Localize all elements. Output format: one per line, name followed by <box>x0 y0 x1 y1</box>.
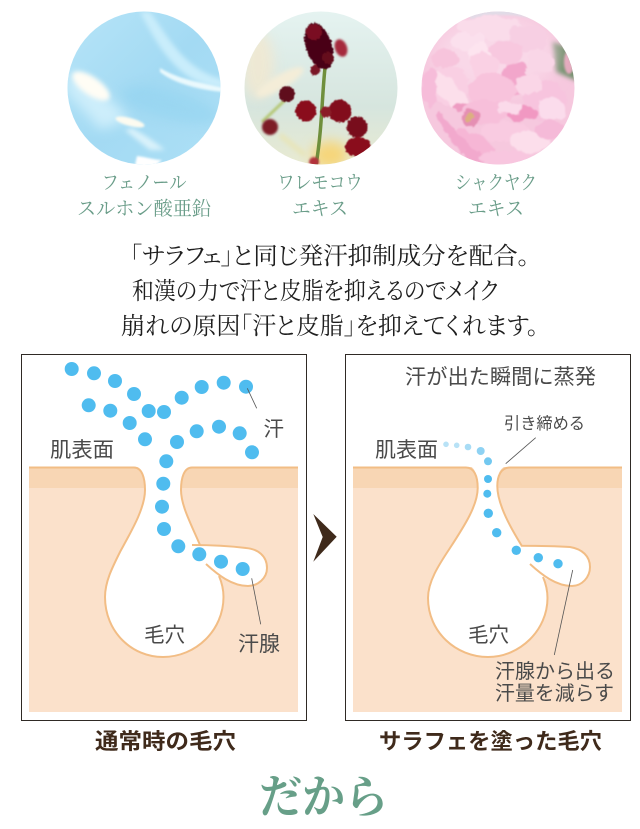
ingredient label: peony extract <box>455 173 537 220</box>
ingredient label: peony extract: シャクヤク <box>455 173 537 194</box>
label: skin surface: 肌表面 <box>375 439 438 462</box>
ingredient label: peony extract: エキス <box>468 199 524 220</box>
photo: burnet flower <box>244 12 398 164</box>
ingredient label: phenol sulfonic acid zinc: スルホン酸亜鉛 <box>77 198 211 220</box>
ingredient label: burnet extract <box>278 173 362 220</box>
photo: pink peony <box>422 12 574 164</box>
label: skin surface: 肌表面 <box>50 439 114 462</box>
ingredient label: burnet extract: ワレモコウ <box>278 173 362 194</box>
skin layers <box>353 467 622 712</box>
label: tightens: 引き締める <box>504 414 585 433</box>
photo: water texture <box>68 12 220 164</box>
label: pore: 毛穴 <box>468 624 509 647</box>
label: reduces sweat amount: 汗量を減らす <box>495 682 614 705</box>
label: evaporates instantly: 汗が出た瞬間に蒸発 <box>405 366 596 389</box>
label: sweat gland: 汗腺 <box>238 633 280 656</box>
ingredient label: phenol sulfonic acid zinc: フェノール <box>102 173 187 194</box>
leader lines <box>247 388 261 624</box>
headline text block: 「サラフェ」と同じ発汗抑制成分を配合。 <box>130 243 530 270</box>
arrow: normal to treated <box>313 514 337 562</box>
evaporating sweat droplets <box>443 442 563 568</box>
headline text block <box>121 243 539 340</box>
pore and sweat gland shape <box>29 466 298 657</box>
sweat droplets <box>65 362 259 576</box>
label: sweat: 汗 <box>264 418 284 441</box>
label: pore: 毛穴 <box>144 624 185 647</box>
label: reduces sweat amount <box>495 660 615 705</box>
ingredient label: burnet extract: エキス <box>292 199 348 220</box>
headline text block: 和漢の力で汗と皮脂を抑えるのでメイク <box>132 278 498 305</box>
caption: pore with Sarafe applied: サラフェを塗った毛穴 <box>379 729 602 754</box>
panel: pore with Sarafe applied <box>346 354 630 720</box>
panel: normal pore <box>22 354 306 720</box>
tightened pore and gland shape <box>353 466 622 657</box>
headline text block: 崩れの原因「汗と皮脂」を抑えてくれます。 <box>121 313 539 340</box>
ingredient label: phenol sulfonic acid zinc <box>77 173 211 220</box>
leader lines <box>506 438 573 655</box>
label: reduces sweat amount: 汗腺から出る <box>495 660 615 683</box>
skin layers <box>29 467 298 712</box>
caption: normal pore: 通常時の毛穴 <box>95 729 236 754</box>
closing word: dakara: だから <box>259 772 388 823</box>
